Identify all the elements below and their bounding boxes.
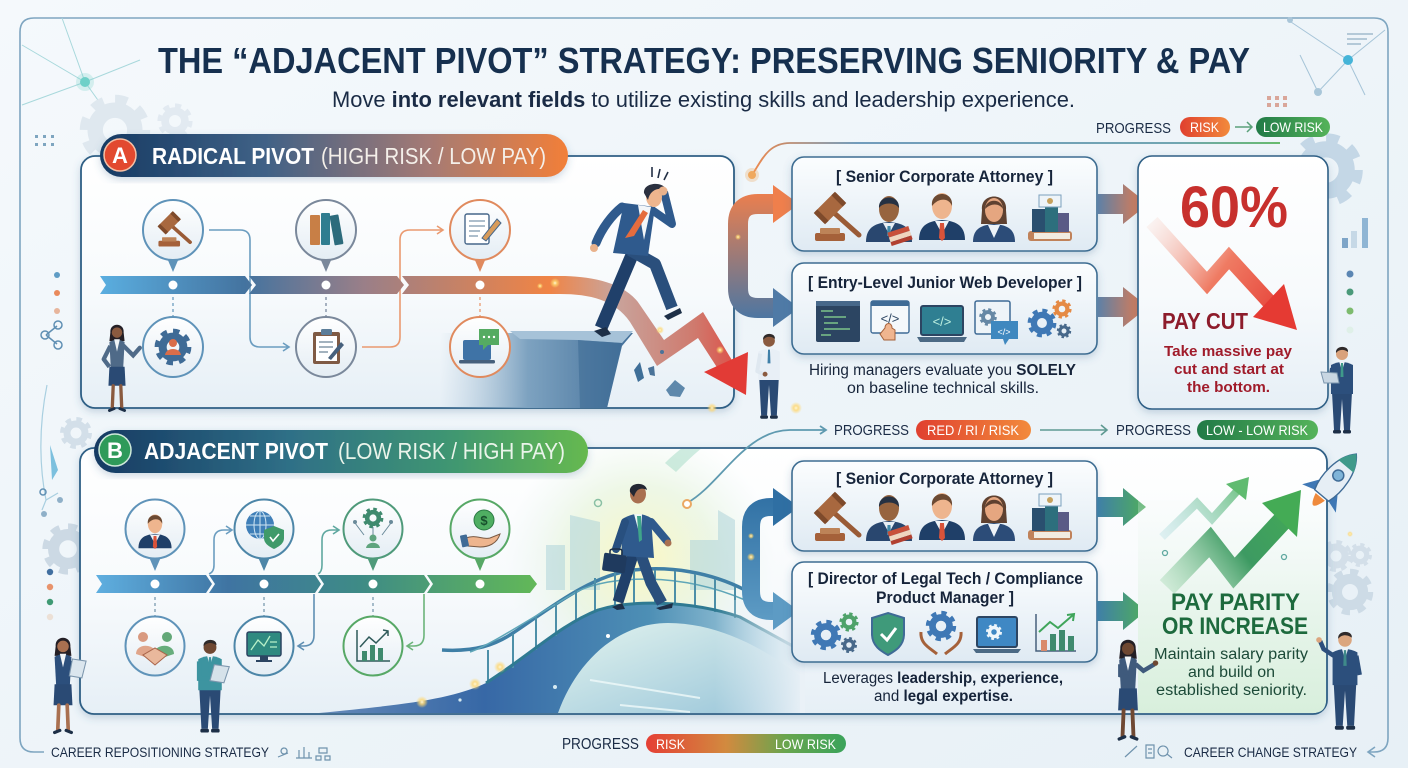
label: pay parity [1162, 589, 1308, 640]
text: pay parity detail: and build on [1188, 664, 1275, 681]
progress legend: top: RISK [1190, 119, 1220, 135]
subtitle: Move into relevant fields to utilize existing skills and leadership experience. [332, 87, 1075, 112]
figure: man walking on bridge [602, 484, 673, 610]
heading: adjacent pivot [94, 430, 588, 473]
text: pay parity detail: Maintain salary parity [1154, 646, 1308, 663]
background decoration: top-left network and gears [22, 18, 189, 159]
box: entry-level developer [792, 263, 1097, 354]
stat: 60 percent: 60% [1180, 175, 1288, 240]
progress legend: middle: PROGRESS [1116, 422, 1191, 439]
icon: rocket [1296, 440, 1373, 519]
mint background [1138, 500, 1326, 713]
text: pay parity detail [1154, 646, 1308, 699]
node: growth chart [344, 616, 402, 676]
panel A background [81, 156, 734, 408]
node: gavel [143, 200, 203, 272]
node: monitor [234, 616, 294, 676]
caption: leverages: and legal expertise. [874, 688, 1013, 705]
node: globe shield [234, 500, 294, 571]
icons: developer tools: </> [881, 311, 899, 326]
icons: legal tech tools [814, 613, 1076, 655]
node: handshake [126, 616, 184, 676]
panel: radical pivot [81, 134, 748, 410]
cliff [440, 331, 685, 408]
node dashes A [173, 297, 480, 317]
box: senior corporate attorney B: [ Senior Corporate Attorney ] [836, 469, 1053, 488]
figure: woman presenter A [104, 325, 140, 410]
heading: adjacent pivot: ADJACENT PIVOT [144, 438, 328, 464]
heading: adjacent pivot: (LOW RISK / HIGH PAY) [338, 438, 565, 464]
panel: pay cut outcome [1138, 156, 1328, 409]
figure: woman with tablet [54, 638, 86, 732]
timeline A [100, 276, 748, 395]
node: professional [126, 500, 184, 571]
icons: legal team A [814, 192, 1072, 246]
figure: man presenter right [1316, 632, 1360, 730]
progress legend: top: LOW RISK [1263, 119, 1324, 135]
box: entry-level developer: [ Entry-Level Junior Web Developer ] [808, 273, 1082, 292]
progress bar: bottom: LOW RISK [775, 736, 837, 752]
caption: leverages [823, 670, 1063, 705]
figure: man with laptop top right [1321, 347, 1353, 434]
progress legend: middle [834, 420, 1318, 440]
chart arrow: light growth [1162, 477, 1249, 537]
node: books [296, 200, 356, 272]
text: pay cut detail [1164, 343, 1293, 396]
icons: developer tools: </> [933, 314, 951, 329]
timeline B [96, 575, 537, 593]
node: document and pen [450, 200, 510, 272]
box: senior corporate attorney B [792, 461, 1097, 551]
icons: legal team B [814, 492, 1072, 545]
text: pay cut detail: Take massive pay [1164, 343, 1293, 360]
background decoration: right gear, bars and dots [1296, 140, 1368, 334]
box: director of legal tech: Product Manager ] [876, 588, 1014, 607]
heading: radical pivot [100, 134, 568, 177]
node: hand with coin [450, 500, 510, 571]
progress legend: top: PROGRESS [1096, 120, 1171, 137]
figure: woman presenter right [1118, 640, 1158, 739]
figure: man stepping off cliff [590, 167, 682, 337]
footer right: career change: CAREER CHANGE STRATEGY [1184, 744, 1358, 760]
progress legend: middle: LOW - LOW RISK [1206, 422, 1309, 438]
chart arrow: bold growth [1167, 490, 1301, 587]
small rings [1162, 550, 1286, 560]
heading: radical pivot: (HIGH RISK / LOW PAY) [321, 143, 546, 169]
node: hand with coin: $ [480, 513, 488, 528]
heading: adjacent pivot: B [107, 438, 123, 463]
background decoration: left lower gears and network [40, 385, 89, 620]
connectors A [209, 226, 443, 351]
box: senior corporate attorney A: [ Senior Corporate Attorney ] [836, 167, 1053, 186]
node: laptop chat [450, 317, 510, 377]
title: THE “ADJACENT PIVOT” STRATEGY: PRESERVING SENIORITY & PAY [158, 40, 1250, 81]
flow arrows: B split [747, 488, 799, 630]
progress legend: middle: PROGRESS [834, 422, 909, 439]
text: pay cut detail: the bottom. [1187, 379, 1270, 396]
figure: man beside arrow [757, 334, 780, 419]
footer left: career repositioning: CAREER REPOSITIONING STRATEGY [51, 744, 270, 760]
figure: man in teal sweater [198, 640, 229, 733]
progress bar: bottom: PROGRESS [562, 736, 639, 753]
text: pay parity detail: established seniority. [1156, 682, 1307, 699]
node: network gear person [344, 500, 402, 571]
footer right: career change [1125, 744, 1358, 760]
progress legend: top [1096, 117, 1330, 137]
node: clipboard [296, 317, 356, 377]
label: pay cut: PAY CUT [1162, 308, 1248, 334]
label: pay parity: PAY PARITY [1171, 589, 1300, 616]
caption: hiring managers [809, 362, 1077, 397]
arrows to outcome A [1097, 184, 1148, 327]
connector line: top [745, 143, 1280, 182]
box: senior corporate attorney A [792, 157, 1097, 251]
caption: hiring managers: Hiring managers evaluate you SOLELY [809, 362, 1077, 379]
progress bar: bottom [562, 734, 846, 753]
text: pay cut detail: cut and start at [1174, 361, 1284, 378]
heading: radical pivot: RADICAL PIVOT [152, 143, 314, 169]
progress bar: bottom: RISK [656, 736, 686, 752]
node: gear with person [143, 317, 203, 377]
arrows to outcome B [1097, 488, 1146, 630]
background decoration: left dots and share icon [41, 272, 62, 349]
label: pay parity: OR INCREASE [1162, 613, 1308, 640]
box: director of legal tech [792, 562, 1097, 662]
box: director of legal tech: [ Director of Legal Tech / Compliance [808, 569, 1083, 588]
background decoration: right lower gears [1323, 531, 1370, 611]
connector: ring and line to progress [594, 402, 826, 508]
icons: developer tools: </> [997, 327, 1011, 337]
progress legend: middle: RED / RI / RISK [927, 422, 1020, 438]
connectors B [209, 526, 424, 650]
heading: radical pivot: A [112, 143, 128, 168]
node dashes B [155, 597, 373, 616]
flow arrows: A split [735, 185, 799, 327]
background decoration: top-right network [1267, 17, 1385, 107]
panel: pay parity outcome [1138, 477, 1326, 713]
caption: hiring managers: on baseline technical skills. [847, 380, 1039, 397]
bridge scene [320, 449, 796, 713]
caption: leverages: Leverages leadership, experience, [823, 670, 1063, 687]
panel: adjacent pivot [54, 402, 1327, 733]
icons: developer tools [816, 301, 1070, 345]
panel B background [80, 448, 1327, 714]
chart arrow: falling [1152, 222, 1297, 330]
